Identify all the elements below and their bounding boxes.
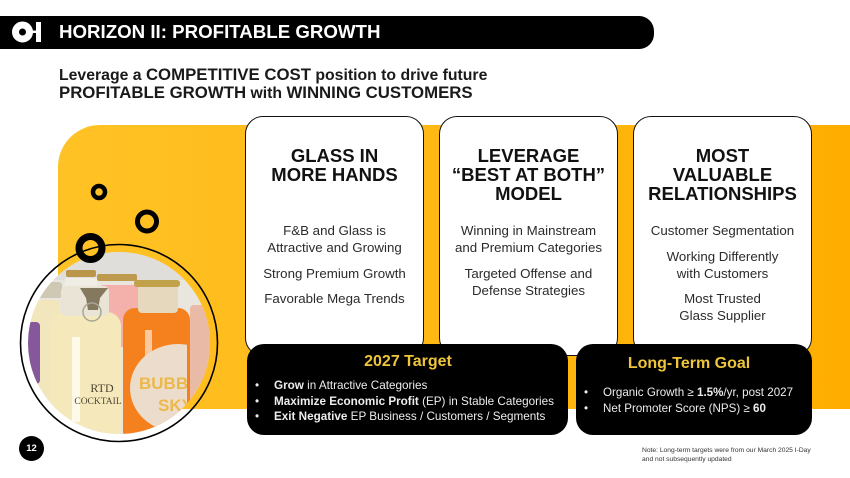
panel: glass in more hands bbox=[245, 116, 424, 356]
photo of bottles bbox=[28, 252, 210, 434]
panel: most valuable relationships bbox=[633, 116, 812, 356]
heading: MOST bbox=[696, 145, 749, 166]
bottle label: SKY bbox=[158, 396, 194, 415]
bullet list: Net Promoter Score (NPS) ≥ 60 bbox=[603, 402, 766, 414]
bullet list: Grow in Attractive Categories bbox=[274, 379, 427, 392]
text block: Attractive and Growing bbox=[267, 240, 402, 255]
yellow background band bbox=[58, 125, 850, 409]
page number badge bbox=[19, 436, 44, 461]
heading: GLASS IN bbox=[291, 145, 378, 166]
photo outline circle bbox=[20, 244, 218, 442]
decorative rings and photo circle bbox=[20, 184, 218, 442]
text block bbox=[263, 223, 406, 306]
logo bbox=[12, 22, 41, 42]
photo of bottles: COCKTAIL bbox=[74, 397, 122, 407]
text block: F&B and Glass is bbox=[283, 223, 386, 238]
heading: Long-Term Goal bbox=[628, 355, 750, 372]
subtitle bbox=[59, 64, 487, 102]
title text: HORIZON II: PROFITABLE GROWTH bbox=[59, 21, 380, 42]
text block bbox=[455, 223, 602, 298]
title bar bbox=[0, 16, 654, 49]
icon: large ring bbox=[79, 236, 102, 260]
icon: small ring bbox=[93, 186, 105, 198]
bullet list bbox=[255, 379, 554, 423]
text block: Targeted Offense and bbox=[465, 266, 592, 280]
text block: with Customers bbox=[677, 266, 768, 280]
page number badge: 12 bbox=[26, 443, 37, 454]
heading: “BEST AT BOTH” bbox=[452, 164, 605, 185]
bullet list: Maximize Economic Profit (EP) in Stable Categories bbox=[274, 394, 554, 408]
text block: Customer Segmentation bbox=[651, 223, 794, 238]
heading: RELATIONSHIPS bbox=[648, 183, 797, 204]
text block: Winning in Mainstream bbox=[461, 223, 596, 238]
text block: Defense Strategies bbox=[472, 282, 585, 298]
bullet list bbox=[584, 386, 793, 414]
bullet list: • bbox=[255, 394, 259, 408]
bullet list: Exit Negative EP Business / Customers / Segments bbox=[274, 410, 545, 423]
text block: Most Trusted bbox=[684, 291, 761, 306]
bottle label: BUBB bbox=[139, 374, 188, 393]
bottle label bbox=[130, 344, 187, 426]
bullet list: Organic Growth ≥ 1.5%/yr, post 2027 bbox=[603, 386, 793, 399]
heading: MORE HANDS bbox=[271, 164, 398, 185]
bullet list: • bbox=[584, 386, 588, 399]
text block: Favorable Mega Trends bbox=[264, 291, 405, 306]
text block: Working Differently bbox=[667, 248, 778, 264]
panel: long-term goal bbox=[576, 344, 812, 435]
bullet list: • bbox=[584, 402, 588, 414]
heading: MODEL bbox=[495, 183, 562, 204]
heading bbox=[452, 145, 605, 204]
heading bbox=[648, 145, 797, 204]
heading: VALUABLE bbox=[673, 164, 772, 185]
bullet list: • bbox=[255, 410, 259, 423]
text block bbox=[651, 223, 794, 323]
subtitle: PROFITABLE GROWTH with WINNING CUSTOMERS bbox=[59, 82, 473, 102]
subtitle: Leverage a COMPETITIVE COST position to drive future bbox=[59, 64, 487, 84]
text block: and Premium Categories bbox=[455, 240, 602, 255]
panel: leverage best at both model bbox=[439, 116, 618, 356]
footnote: Note: Long-term targets were from our March 2025 I-Day bbox=[642, 447, 811, 454]
icon: medium ring bbox=[138, 212, 156, 231]
footnote bbox=[642, 447, 811, 463]
bullet list: • bbox=[255, 379, 259, 392]
panel: 2027 target bbox=[247, 344, 568, 435]
text block: Glass Supplier bbox=[679, 308, 766, 323]
heading: 2027 Target bbox=[364, 353, 452, 370]
bottle label text: RTD bbox=[90, 381, 114, 395]
text block: Strong Premium Growth bbox=[263, 266, 406, 280]
footnote: and not subsequently updated bbox=[642, 456, 732, 463]
heading bbox=[271, 145, 398, 185]
heading: LEVERAGE bbox=[478, 145, 579, 166]
